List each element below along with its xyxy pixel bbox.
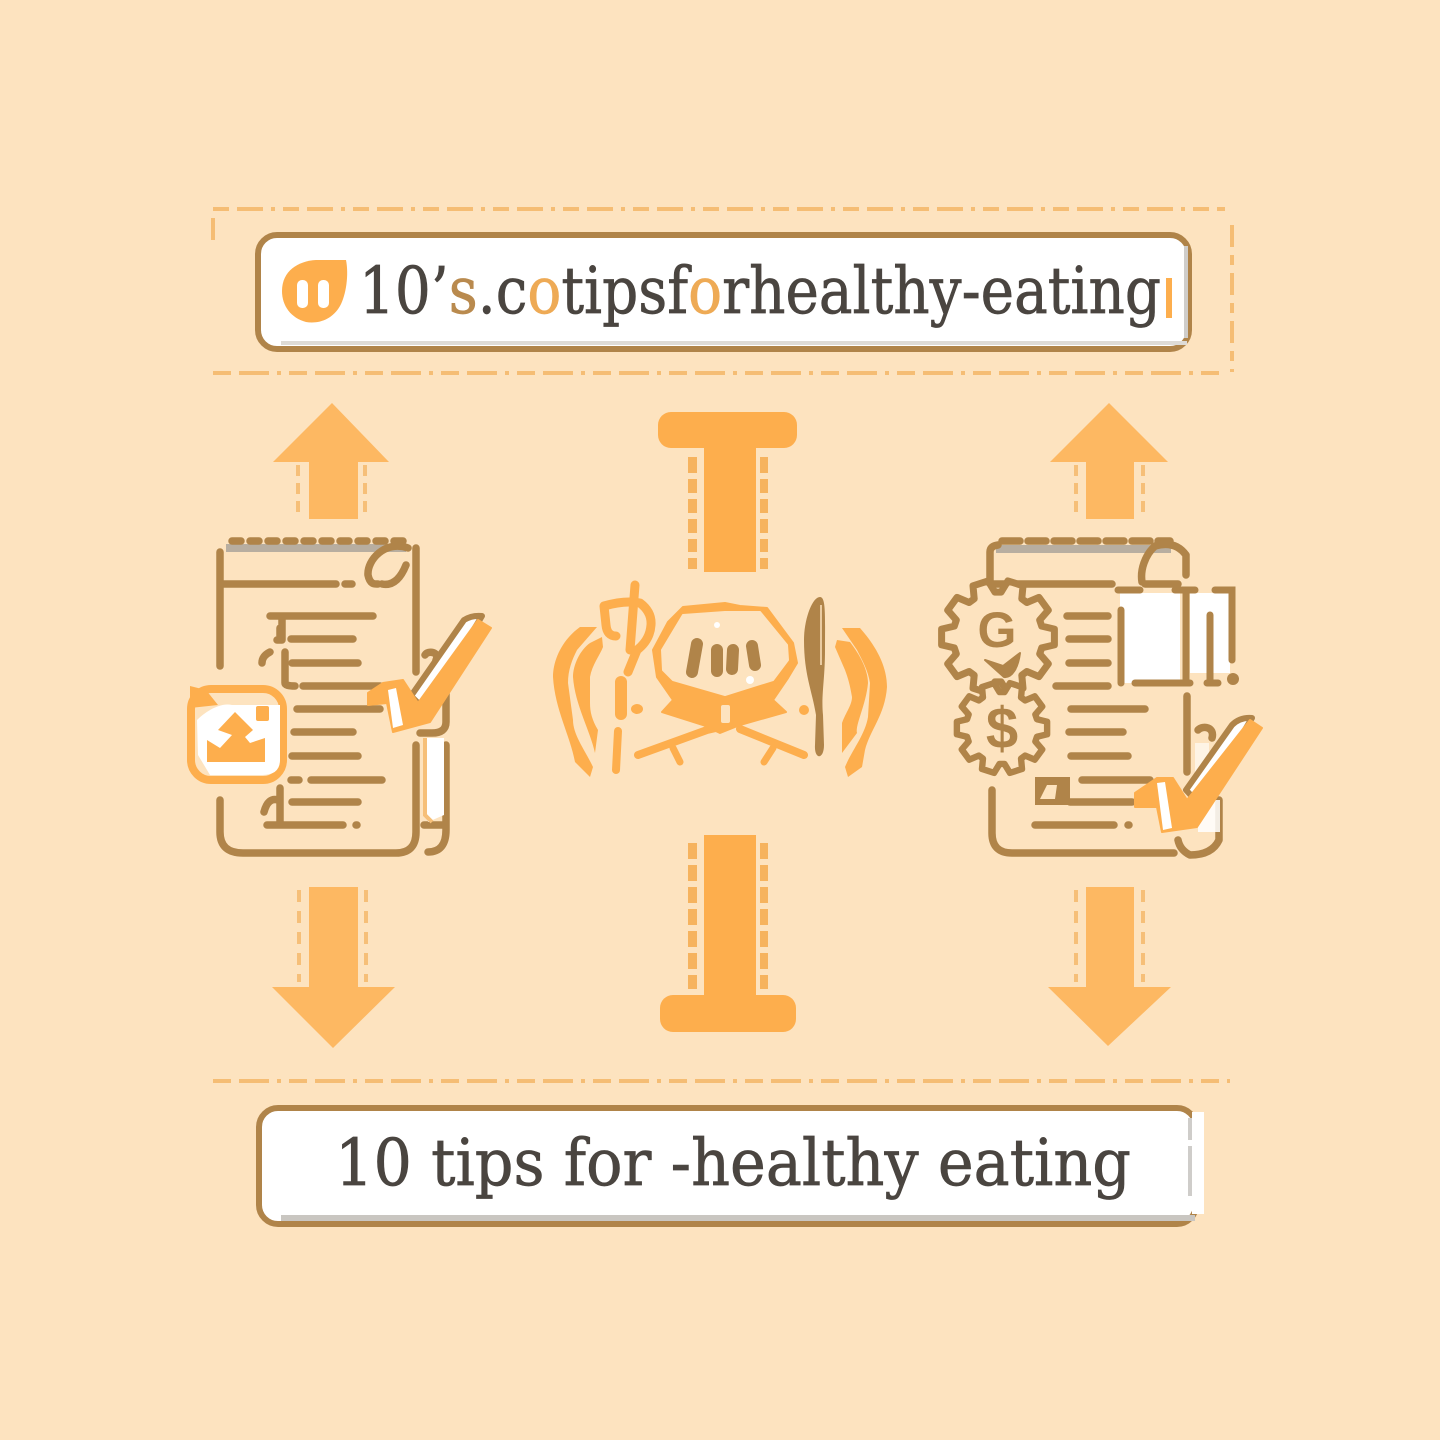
connector: top center bar bbox=[658, 412, 797, 572]
icon: checkmark bbox=[1135, 718, 1262, 832]
icon: checkmark bbox=[368, 616, 491, 732]
title text: top: 10’s.cotipsforhealthy-eating bbox=[359, 254, 1161, 329]
arrow: top right up bbox=[1050, 403, 1168, 519]
title box: bottom bbox=[259, 1108, 1204, 1224]
icon: gear with dollar bbox=[957, 683, 1047, 773]
icon: orange badge bbox=[282, 260, 347, 322]
icon: gear with dollar: $ bbox=[986, 696, 1018, 761]
icon: central plate and cutlery bbox=[553, 585, 887, 777]
arrow: top left up bbox=[273, 403, 389, 519]
panel: right document with coins bbox=[942, 541, 1262, 855]
connector: bottom center bar bbox=[660, 835, 796, 1032]
icon: gear with letter bbox=[942, 581, 1054, 693]
arrow: bottom left down bbox=[272, 887, 395, 1048]
title text: bottom: 10 tips for -healthy eating bbox=[335, 1126, 1131, 1201]
panel: left document checklist bbox=[190, 541, 491, 853]
arrow: bottom right down bbox=[1048, 887, 1171, 1046]
fork bbox=[604, 585, 804, 770]
knife bbox=[804, 597, 825, 756]
icon: crown badge bbox=[190, 686, 283, 780]
icon: gear with letter: G bbox=[978, 602, 1016, 658]
title box: top bbox=[258, 235, 1189, 349]
